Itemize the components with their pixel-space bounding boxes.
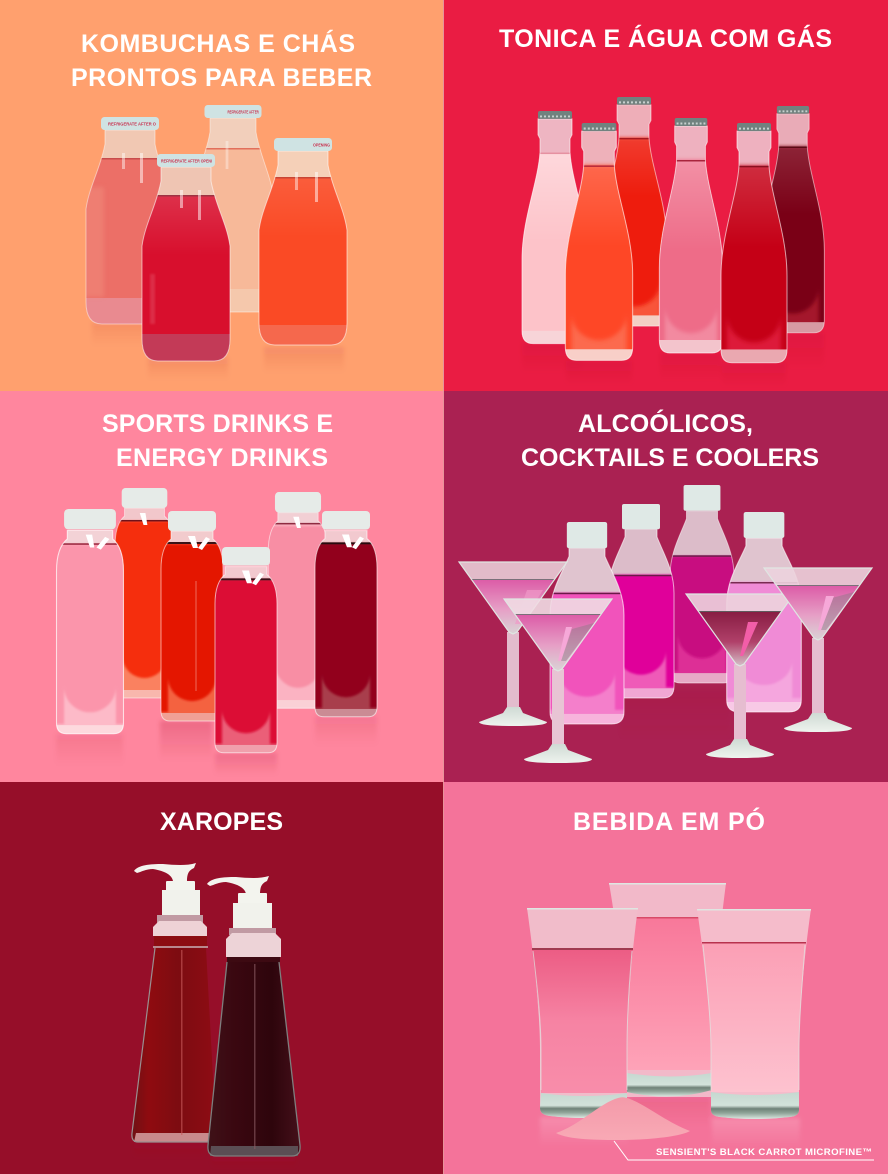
bottle: dark red sports drink <box>313 511 379 720</box>
bottle: rose tonic <box>657 118 725 358</box>
bottle: dark wine tonic <box>772 106 825 334</box>
heading: sports drinks: ENERGY DRINKS <box>116 444 328 472</box>
bottle: orange sports drink <box>114 488 172 698</box>
bottle: pink left <box>548 522 626 729</box>
bottle: deep magenta <box>668 485 736 688</box>
bottle: red kombucha <box>140 154 232 365</box>
reflections: sports bottles <box>56 716 377 775</box>
heading: tonica: TONICA E ÁGUA COM GÁS <box>499 24 832 53</box>
martini glass: back right <box>762 568 874 732</box>
heading: alcoólicos: COCKTAILS E COOLERS <box>521 444 819 472</box>
powder pile <box>556 1097 690 1140</box>
heading: xaropes: XAROPES <box>160 808 283 836</box>
callout: sensient's black carrot microfine: SENSIENT'S BLACK CARROT MICROFINE™ <box>656 1147 872 1158</box>
reflection: cocktail group <box>620 690 730 740</box>
bottle: magenta <box>611 504 674 698</box>
reflections: kombucha bottles <box>92 322 344 380</box>
panel: xaropes <box>0 782 443 1174</box>
bottle: salmon kombucha: REFRIGERATE AFTER O <box>108 122 156 126</box>
bottle: red syrup <box>132 863 216 1142</box>
reflections: tonic bottles <box>522 333 824 387</box>
bottle: red sports drink <box>159 511 225 723</box>
panel: kombuchas e chás prontos para beber <box>0 0 443 391</box>
panel: sports drinks e energy drinks <box>0 391 443 782</box>
panel: bebida em pó <box>444 782 888 1174</box>
bottle: pale pink tonic <box>522 111 578 344</box>
bottle: red kombucha: REFRIGERATE AFTER OPENI <box>161 158 212 164</box>
bottle: pale pink sports drink back <box>266 492 330 710</box>
bottle: salmon kombucha <box>86 117 161 324</box>
martini glass: back left <box>457 562 569 726</box>
callout: sensient's black carrot microfine <box>614 1141 874 1160</box>
heading: kombuchas: PRONTOS PARA BEBER <box>71 64 372 92</box>
bottle: crimson sports drink <box>213 547 279 756</box>
bottle: peach kombucha: REFRIGERATE AFTER <box>227 109 259 115</box>
martini glass: front right <box>684 594 796 758</box>
bottle: orange kombucha: OPENING <box>313 142 330 148</box>
glass: right <box>697 909 811 1119</box>
heading: sports drinks: SPORTS DRINKS E <box>102 410 333 438</box>
bottle: orange kombucha <box>257 138 349 349</box>
martini glass: front left <box>502 599 614 763</box>
glass: centre <box>609 883 726 1097</box>
bottle: light pink right <box>724 512 804 717</box>
heading: alcoólicos: ALCOÓLICOS, <box>578 408 753 438</box>
heading: kombuchas: KOMBUCHAS E CHÁS <box>81 29 355 58</box>
bottle: dark syrup <box>207 876 300 1156</box>
reflections: syrup bottles <box>134 1142 296 1168</box>
bottle: peach kombucha <box>204 105 272 312</box>
heading: bebida em pó: BEBIDA EM PÓ <box>573 806 765 836</box>
reflections: glasses <box>540 1097 800 1148</box>
bottle: red tonic <box>719 123 789 368</box>
bottle: orange tonic <box>563 123 635 365</box>
glass: left <box>527 908 638 1118</box>
bottle: pink sports drink front <box>54 509 126 737</box>
bottle: orange-red tonic <box>614 97 666 327</box>
panel: tonica e água com gás <box>444 0 888 391</box>
panel: alcoólicos, cocktails e coolers <box>444 391 888 782</box>
